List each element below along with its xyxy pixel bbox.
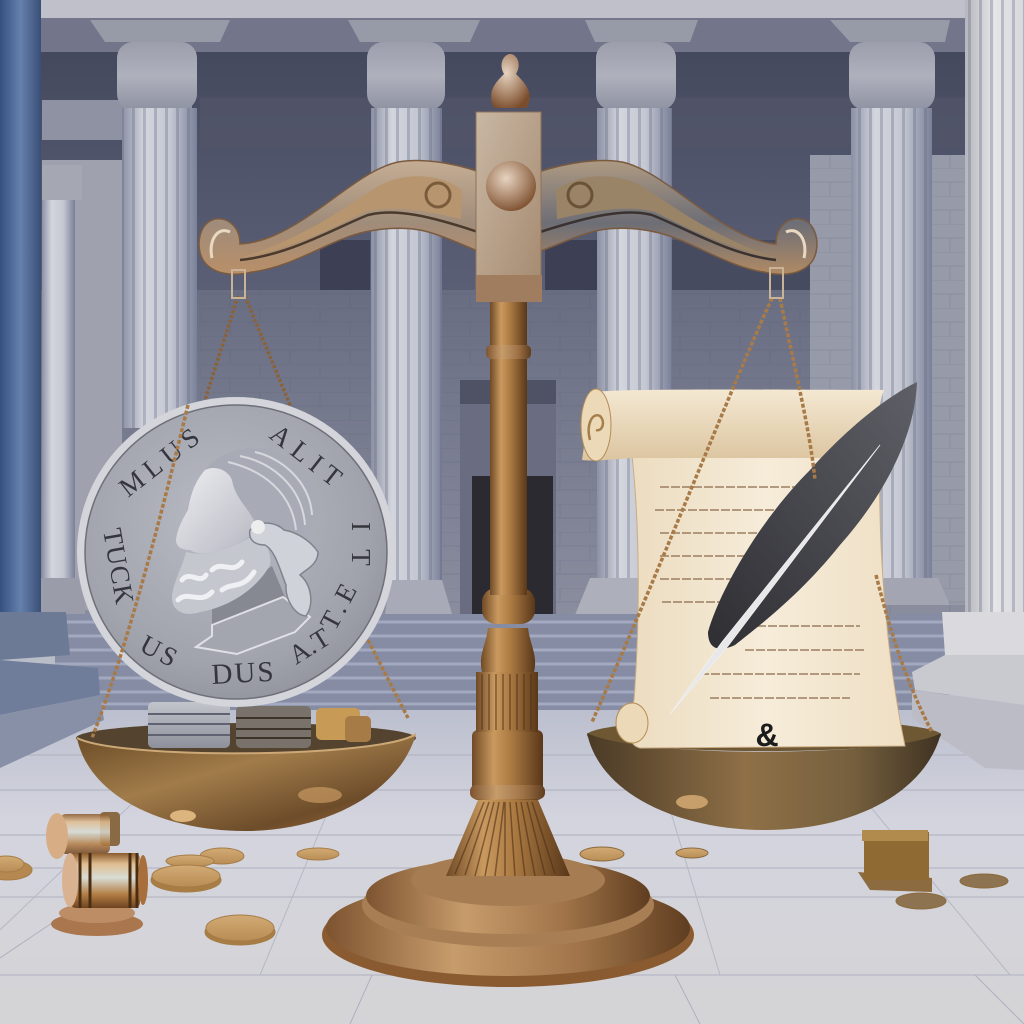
right pan with scroll	[581, 268, 941, 830]
coin inscriptions: TUCK	[97, 526, 140, 607]
coin portrait	[172, 448, 318, 654]
left bowl back	[76, 723, 416, 753]
floor	[0, 710, 1024, 1024]
coin inscriptions	[97, 418, 376, 691]
doorway	[460, 380, 556, 615]
right chains	[592, 298, 932, 732]
coin inscriptions: DUS	[211, 656, 276, 691]
entablature	[0, 0, 1024, 18]
coin inscriptions: T.E	[314, 574, 365, 635]
beam left	[199, 160, 480, 274]
scroll text lines	[655, 487, 865, 698]
small coins and gavels on floor	[0, 812, 1008, 945]
scroll	[581, 389, 905, 753]
seal mark: &	[755, 717, 779, 753]
coin inscriptions: US	[135, 629, 185, 674]
steps	[55, 614, 950, 710]
stand pole	[490, 300, 527, 595]
plinth right	[912, 612, 1024, 770]
coin inscriptions: ALIT	[264, 418, 353, 497]
scale stand	[199, 54, 817, 987]
stand neck	[446, 588, 570, 876]
small box right	[858, 830, 932, 892]
left pan with coin	[76, 270, 416, 831]
coin	[77, 397, 395, 707]
floor coins left	[0, 848, 339, 945]
left bowl	[77, 734, 416, 831]
gavel: upper left	[46, 812, 120, 859]
left back chains	[205, 296, 290, 405]
gavel: lower left	[51, 853, 148, 936]
feather	[670, 382, 917, 714]
coin inscriptions: I T	[346, 522, 376, 572]
coin inscriptions: MLUS	[113, 418, 210, 503]
stand base	[322, 854, 694, 987]
central block	[476, 54, 542, 302]
columns	[0, 0, 1024, 615]
right bowl	[587, 719, 941, 830]
beam right	[538, 160, 817, 274]
plinth left	[0, 612, 104, 768]
floor coins right	[580, 847, 1008, 909]
coin stacks	[148, 702, 371, 748]
coin inscriptions: A.T	[283, 622, 336, 670]
left front chains	[92, 405, 408, 738]
